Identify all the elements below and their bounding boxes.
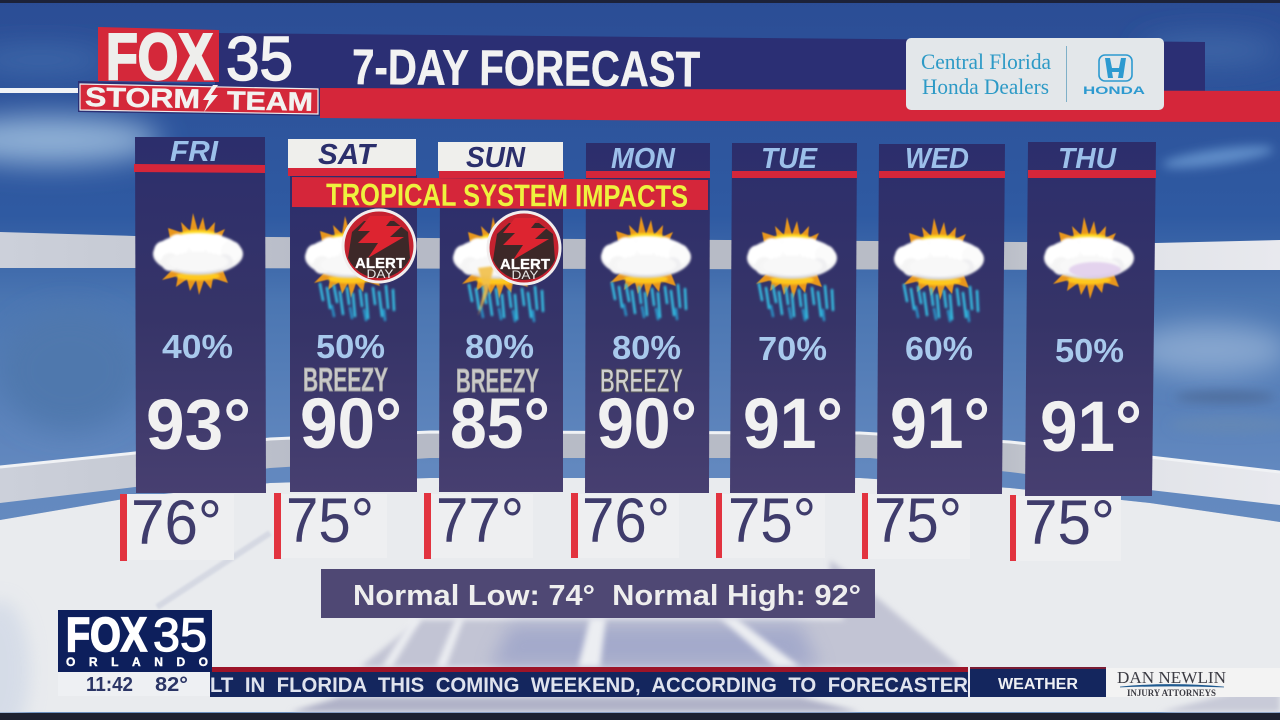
panel: SAT <box>288 139 417 492</box>
logo: FOX 35 Storm Team <box>78 20 320 117</box>
sponsor: Dan Newlin: INJURY ATTORNEYS <box>1127 689 1216 699</box>
icon: alert day SAT: ALERT <box>355 255 405 272</box>
panel: SUN <box>438 142 564 492</box>
icon: alert day SUN <box>486 210 562 286</box>
panel: SAT: 50% <box>316 328 385 365</box>
panel: FRI: FRI <box>170 136 219 168</box>
sponsor: Central Florida Honda Dealers: HONDA <box>1083 85 1145 97</box>
panel: MON: MON <box>611 143 676 175</box>
panel: TUE: TUE <box>761 143 819 175</box>
logo: FOX 35 Storm Team: FOX <box>106 20 213 93</box>
logo: FOX 35 Storm Team: STORM <box>85 82 200 114</box>
panel: FRI: 93° <box>146 386 251 465</box>
sponsor: Dan Newlin <box>1106 668 1280 699</box>
icon: alert day SAT <box>342 208 416 284</box>
icon: alert day SUN: DAY <box>512 270 539 282</box>
panel: THU: THU <box>1058 143 1117 175</box>
panel: SAT: SAT <box>318 139 377 171</box>
panel: SAT: BREEZY <box>303 361 388 398</box>
panel: FRI <box>134 136 266 493</box>
low temperatures row: 75° <box>286 486 374 556</box>
panel: WED: 91° <box>890 385 990 464</box>
low temperatures row <box>120 486 1121 561</box>
icon: alert day SAT: DAY <box>366 269 394 281</box>
low temperatures row: 75° <box>1024 488 1115 558</box>
panel: WED: 60% <box>905 330 973 367</box>
logo: FOX 35 Orlando with clock: 11:42 <box>86 674 133 696</box>
panel: THU <box>1025 142 1156 496</box>
news ticker: LT IN FLORIDA THIS COMING WEEKEND, ACCORDING TO FORECASTER <box>210 674 968 697</box>
logo: FOX 35 Orlando with clock: FOX <box>66 609 147 662</box>
panel: TUE: 91° <box>743 385 843 464</box>
logo: FOX 35 Orlando with clock: 82° <box>155 674 188 696</box>
panel: MON: 80% <box>612 329 681 366</box>
panel: SUN: 85° <box>450 385 550 464</box>
panel: FRI: 40% <box>162 328 233 365</box>
sponsor: Central Florida Honda Dealers: Honda Dealers <box>922 74 1049 99</box>
sponsor: Dan Newlin: DAN NEWLIN <box>1117 668 1226 687</box>
panel: TUE: 70% <box>758 330 827 367</box>
low temperatures row: 75° <box>874 486 962 556</box>
low temperatures row: 76° <box>131 488 222 558</box>
banner: tropical system impacts: TROPICAL SYSTEM IMPACTS <box>326 177 688 214</box>
panel: WED: WED <box>905 143 969 175</box>
panel: SAT: 90° <box>300 385 402 464</box>
panel: MON <box>585 143 710 493</box>
sponsor: Central Florida Honda Dealers: Central Florida <box>921 49 1051 74</box>
sponsor: Central Florida Honda Dealers <box>906 38 1164 110</box>
logo: FOX 35 Orlando with clock: 35 <box>153 608 207 661</box>
logo: FOX 35 Storm Team: TEAM <box>227 85 313 117</box>
panel: THU: 50% <box>1055 332 1124 369</box>
logo: FOX 35 Orlando with clock <box>58 608 212 696</box>
normal low and high: Normal Low: 74° Normal High: 92° <box>353 580 861 612</box>
low temperatures row: 75° <box>728 486 816 556</box>
news ticker <box>58 667 1106 697</box>
panel: SUN: 80% <box>465 328 534 365</box>
logo: FOX 35 Orlando with clock: ORLANDO <box>66 655 208 669</box>
low temperatures row: 76° <box>582 486 670 556</box>
news ticker: WEATHER <box>998 676 1078 693</box>
panel: MON: BREEZY <box>600 362 683 399</box>
panel: THU: 91° <box>1040 388 1142 467</box>
panel: MON: 90° <box>597 385 697 464</box>
title: 7-DAY FORECAST <box>352 39 700 97</box>
icon: alert day SUN: ALERT <box>500 256 550 273</box>
panel: WED <box>877 143 1005 494</box>
header band <box>215 33 1280 122</box>
panel: SUN: BREEZY <box>456 362 539 399</box>
panel: SUN: SUN <box>466 142 526 174</box>
logo: FOX 35 Storm Team: 35 <box>226 25 293 94</box>
panel: TUE <box>730 143 857 493</box>
low temperatures row: 77° <box>436 486 524 556</box>
normal low and high <box>321 569 875 618</box>
